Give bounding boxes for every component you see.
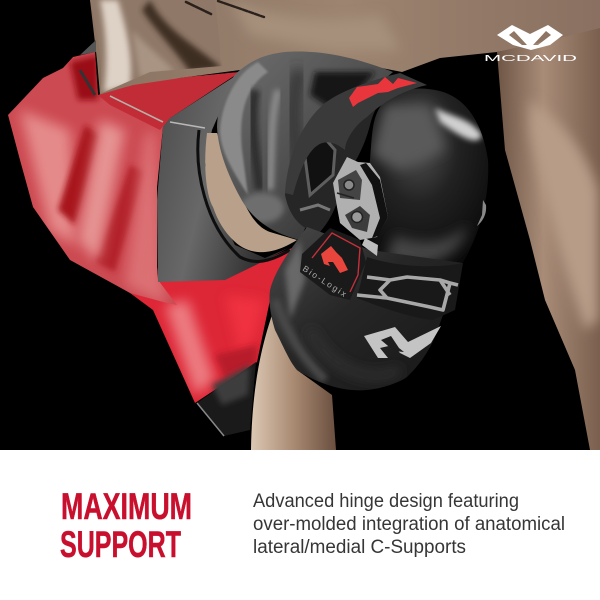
grey compression shorts (157, 73, 290, 282)
right forearm (497, 28, 600, 450)
tattoo on torso (186, 1, 264, 17)
lower calf sleeve (269, 227, 463, 390)
torso and raised arm skin (90, 0, 600, 95)
icon: red McDavid logo on strap (349, 77, 417, 107)
upper thigh sleeve (217, 51, 393, 240)
hex pattern strap (357, 257, 463, 320)
heading: Maximum Support: MAXIMUM (61, 486, 192, 527)
body text block: lateral/medial C-Supports (253, 537, 466, 558)
white caption panel (0, 450, 600, 600)
body text block: Advanced hinge design featuring (253, 491, 519, 512)
heading: Maximum Support (60, 486, 192, 565)
top band with red logo (285, 73, 427, 195)
icon: large silver M logo on calf (364, 326, 441, 358)
black background (0, 0, 600, 450)
lower red shorts (130, 248, 292, 403)
text: McDavid wordmark: MCDAVID (484, 53, 577, 63)
side panel with hex pattern (285, 110, 376, 232)
black under shorts hem (197, 362, 256, 436)
icon: red M logo on tab (321, 246, 348, 273)
text: Bio-Logix: Bio-Logix (301, 263, 349, 299)
lower leg skin (251, 315, 336, 450)
photo panel: athlete wearing knee brace (0, 0, 600, 450)
strap tab with red logo and Bio-Logix text (300, 228, 366, 300)
knee cap black shell (367, 88, 488, 268)
inner thigh skin (205, 133, 297, 252)
body text block: over-molded integration of anatomical (253, 514, 565, 535)
brand logo: McDavid (484, 25, 577, 63)
body text block (253, 491, 565, 558)
icon: McDavid M mark (497, 25, 563, 50)
upper red shorts (8, 40, 240, 305)
heading: Maximum Support: SUPPORT (60, 524, 181, 565)
metal hinge (333, 157, 388, 256)
